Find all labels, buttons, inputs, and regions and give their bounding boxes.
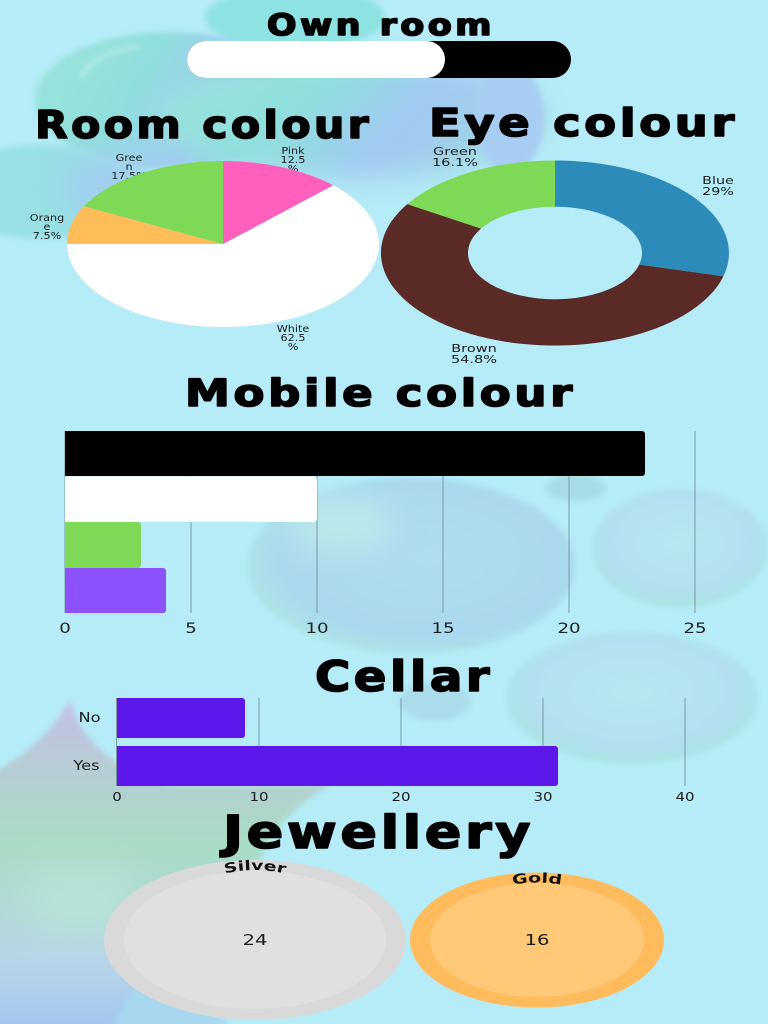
pie label: pink: 12.5 xyxy=(281,155,305,166)
pie label: pink: Pink xyxy=(281,146,305,157)
pie chart: room colour xyxy=(30,146,379,353)
donut chart: eye colour xyxy=(381,146,734,366)
axis labels: 20 xyxy=(391,790,411,805)
bar: purple 4 xyxy=(65,568,166,613)
axis labels: 15 xyxy=(431,620,455,636)
category labels: Yes xyxy=(72,759,100,774)
axis labels: 0 xyxy=(112,790,122,805)
donut label: green: Green xyxy=(433,146,477,158)
axis labels xyxy=(112,790,695,805)
pie label: green: n xyxy=(125,162,133,173)
slice: blue xyxy=(555,160,729,276)
pie label: white: White xyxy=(277,324,309,335)
pie label: orange: 7.5% xyxy=(33,231,61,242)
title: Cellar: Cellar xyxy=(315,652,493,701)
donut label: blue: Blue xyxy=(702,175,734,187)
axis labels: 25 xyxy=(683,620,707,636)
axis labels: 10 xyxy=(305,620,329,636)
bar: No 9 xyxy=(117,698,245,738)
pie label: orange: e xyxy=(44,222,50,233)
slice: orange xyxy=(67,206,223,244)
value: 24: 24 xyxy=(243,932,267,949)
bar chart: mobile colour xyxy=(59,431,707,636)
donut label: blue: 29% xyxy=(702,186,734,198)
pie label: orange: Orang xyxy=(30,213,64,224)
slice: white xyxy=(67,185,379,327)
pie label: pink: % xyxy=(288,164,298,175)
bar: white 10 xyxy=(65,476,317,522)
slice: green xyxy=(407,160,555,229)
bar: Yes 31 xyxy=(117,746,558,786)
slice: green xyxy=(84,161,223,244)
bubble: silver xyxy=(104,860,406,1020)
bar chart: cellar xyxy=(72,698,695,805)
title: Jewellery: Jewellery xyxy=(219,806,534,859)
category labels xyxy=(72,711,101,774)
progress bar: own room xyxy=(187,41,571,78)
axis labels: 30 xyxy=(533,790,553,805)
pie label: green: Gree xyxy=(116,153,142,164)
axis labels: 0 xyxy=(59,620,71,636)
donut label: green: 16.1% xyxy=(432,157,478,169)
donut label: brown: Brown xyxy=(451,343,497,355)
bar: black 23 xyxy=(65,431,645,476)
title: Room colour: Room colour xyxy=(35,103,372,147)
donut label: brown: 54.8% xyxy=(451,354,497,366)
value: 16: 16 xyxy=(525,932,549,949)
title: Mobile colour: Mobile colour xyxy=(185,372,576,415)
slice: pink xyxy=(223,161,333,244)
label: silver: Silver xyxy=(224,860,287,873)
pie label: white: 62.5 xyxy=(281,333,305,344)
title: Own room: Own room xyxy=(267,8,495,42)
axis labels: 10 xyxy=(249,790,269,805)
axis labels: 40 xyxy=(675,790,695,805)
bubble: gold xyxy=(410,872,664,1008)
category labels: No xyxy=(78,711,101,726)
pie label: white: % xyxy=(288,342,298,353)
title: Eye colour: Eye colour xyxy=(429,101,738,145)
slice: brown xyxy=(381,204,723,346)
label: gold: Gold xyxy=(512,872,562,884)
axis labels xyxy=(59,620,707,636)
bar: green 3 xyxy=(65,522,141,568)
pie label: green: 17.5% xyxy=(111,171,147,182)
axis labels: 20 xyxy=(557,620,581,636)
axis labels: 5 xyxy=(185,620,197,636)
